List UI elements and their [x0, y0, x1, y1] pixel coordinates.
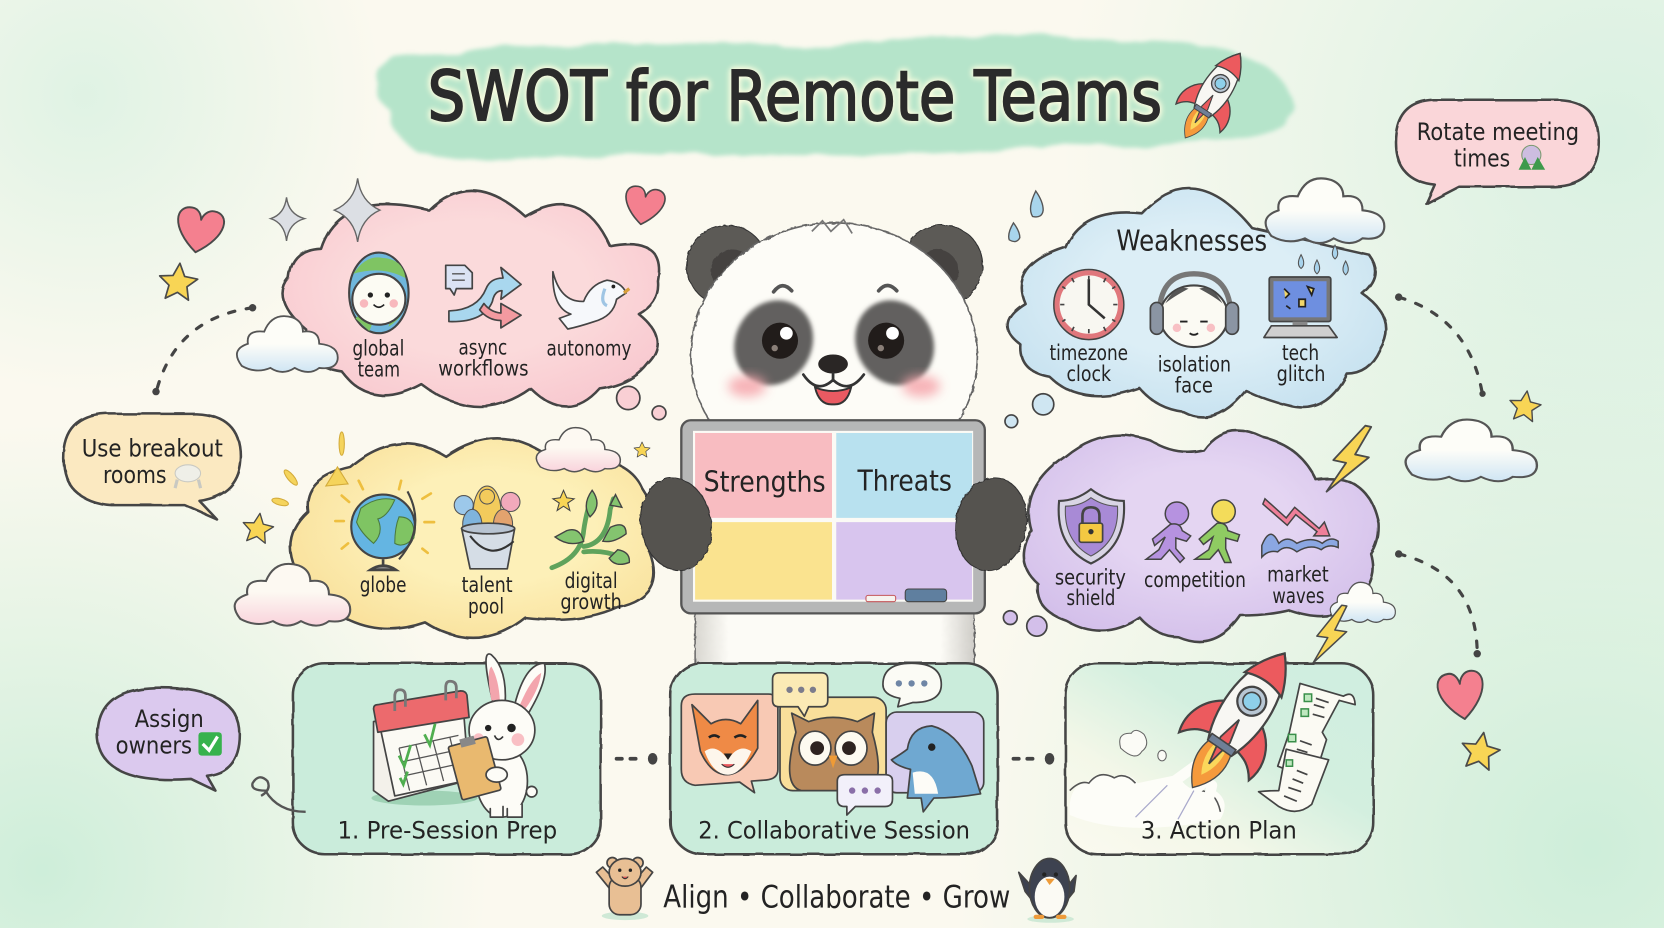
label: digital growth: [560, 569, 622, 615]
callout: breakout rooms: Use breakout: [82, 433, 223, 462]
panda mascot: [64, 178, 1543, 923]
label: async workflows: workflows: [438, 357, 528, 382]
label: global team: global: [352, 337, 404, 362]
icon: global team: [349, 253, 409, 333]
quadrant: threats lower: [836, 522, 972, 600]
icon: pink cloud lower left: [235, 564, 350, 626]
label: async workflows: async: [458, 335, 507, 360]
decorations: heart and star lower right: [1436, 669, 1503, 771]
eyebrows: [774, 285, 897, 292]
panda body: [695, 594, 974, 669]
marker and eraser: [866, 589, 947, 602]
icon: action rocket: [1156, 628, 1321, 813]
decorations: hearts and stars left: [158, 185, 667, 544]
label: digital growth: digital: [565, 569, 618, 594]
eye patches: [719, 286, 949, 399]
icon: timezone clock: [1054, 270, 1124, 340]
label: threats: Threats: [857, 463, 952, 497]
icon: tech glitch laptop: [1264, 277, 1337, 337]
label: digital growth: growth: [560, 590, 622, 615]
label: globe: globe: [360, 573, 406, 598]
title: SWOT for Remote Teams: [428, 57, 1162, 137]
callout: breakout rooms: [64, 414, 241, 519]
icon: async workflows: [446, 265, 521, 328]
icon: title rocket: [1162, 38, 1263, 153]
icon: pink cloud on yellow cloud: [536, 428, 620, 472]
label: isolation face: face: [1175, 374, 1213, 399]
label: isolation face: isolation: [1158, 352, 1231, 377]
icon: lightning lower: [1313, 602, 1350, 667]
panel: collaborative session: [671, 663, 998, 854]
panel: threats cloud: [1024, 431, 1379, 642]
label: tech glitch: glitch: [1277, 362, 1325, 387]
panel: weaknesses cloud: [1008, 188, 1386, 417]
icon: autonomy dove: [553, 272, 629, 329]
thought bubbles: [617, 386, 1054, 636]
arrow: owner loop: [252, 777, 306, 812]
chat bubble: white: [883, 663, 941, 707]
label: timezone clock: clock: [1067, 362, 1112, 387]
callout: rotate meeting times: [1396, 100, 1599, 204]
dashed path: top left: [152, 304, 256, 395]
label: tech glitch: [1277, 341, 1325, 387]
decorations: yellow rays: [271, 432, 348, 507]
label: security shield: [1055, 566, 1126, 611]
callout: rotate meeting times: times: [1454, 144, 1510, 173]
icon: tiny white ball: [175, 465, 201, 488]
label: talent pool: talent: [462, 573, 513, 598]
arrow: step 2 to 3: [1013, 753, 1054, 765]
icon: checklist scroll: [1259, 683, 1355, 811]
label: talent pool: [462, 573, 513, 619]
icon: bear: [596, 857, 653, 920]
label: step 2: 2. Collaborative Session: [698, 815, 970, 844]
icon: lightning top: [1327, 421, 1375, 499]
panda head: [691, 220, 977, 488]
panel: pre-session prep: [293, 654, 601, 854]
label: market waves: [1267, 563, 1329, 609]
icon: check box: [198, 732, 222, 756]
video tile: fox: [681, 694, 778, 793]
quadrant: strengths: [695, 433, 832, 518]
decorations: water drops: [1009, 191, 1043, 242]
title band: [377, 35, 1293, 159]
eyes: [762, 323, 904, 359]
callout: assign owners: owners: [116, 730, 192, 759]
label: security shield: security: [1055, 566, 1126, 591]
icon: market waves: [1262, 499, 1338, 557]
callout: assign owners: [98, 688, 240, 791]
icon: small cloud by threats: [1330, 582, 1395, 622]
icon: security shield: [1059, 489, 1124, 564]
icon: small cloud left: [237, 316, 338, 372]
icon: rabbit: [447, 654, 545, 817]
label: tech glitch: tech: [1282, 341, 1319, 366]
video tile: owl: [780, 697, 886, 791]
label: competition: competition: [1144, 568, 1246, 593]
callout: rotate meeting times: Rotate meeting: [1417, 117, 1579, 146]
label: step 3: 3. Action Plan: [1141, 815, 1297, 844]
label: market waves: waves: [1272, 584, 1324, 609]
footer tagline: Align • Collaborate • Grow: [663, 879, 1010, 915]
callout: assign owners: Assign: [135, 704, 204, 733]
label: async workflows: [438, 335, 528, 382]
dashed path: top right: [1395, 293, 1486, 397]
label: timezone clock: timezone: [1050, 341, 1128, 366]
chat bubble: lavender: [837, 775, 892, 815]
icon: launch smoke: [1070, 730, 1225, 828]
dashed path: lower right: [1395, 550, 1481, 657]
arrow: step 1 to 2: [617, 753, 657, 765]
icon: talent pool bucket: [454, 486, 520, 569]
icon: penguin: [1019, 859, 1076, 923]
panda paws: [633, 472, 1034, 576]
tablet board: [681, 420, 985, 613]
panel: strengths cloud: [283, 190, 659, 407]
icon: rain cloud: [1266, 178, 1384, 275]
cheeks: [728, 376, 940, 397]
label: isolation face: [1158, 352, 1231, 399]
icon: isolation face: [1150, 274, 1238, 347]
label: security shield: shield: [1067, 586, 1115, 611]
icon: calendar: [371, 681, 478, 805]
label: autonomy: autonomy: [547, 337, 631, 362]
panel: opportunities cloud: [290, 438, 655, 638]
label: step 1: 1. Pre-Session Prep: [337, 815, 557, 844]
label: timezone clock: [1050, 341, 1128, 387]
heading: weaknesses: Weaknesses: [1116, 223, 1267, 257]
label: market waves: market: [1267, 563, 1329, 588]
icon: competition runners: [1146, 500, 1240, 562]
video tile: dolphin: [886, 712, 984, 812]
label: talent pool: pool: [468, 594, 504, 619]
nose and mouth: [803, 354, 864, 404]
label: global team: [352, 337, 404, 383]
panel: action plan: [1065, 628, 1373, 854]
icon: globe: [335, 481, 434, 570]
label: global team: team: [358, 358, 400, 383]
quadrant: opportunities: [695, 522, 832, 600]
chat bubble: yellow: [773, 673, 828, 716]
decorations: sparkles: [271, 178, 380, 242]
quadrant: threats: [836, 433, 972, 518]
icon: small rotate badge: [1519, 145, 1545, 170]
panda ears: [687, 225, 983, 306]
callout: breakout rooms: rooms: [103, 460, 167, 489]
decorations: star and cloud right: [1406, 389, 1543, 481]
icon: digital growth: [552, 490, 629, 568]
label: strengths: Strengths: [704, 464, 826, 498]
